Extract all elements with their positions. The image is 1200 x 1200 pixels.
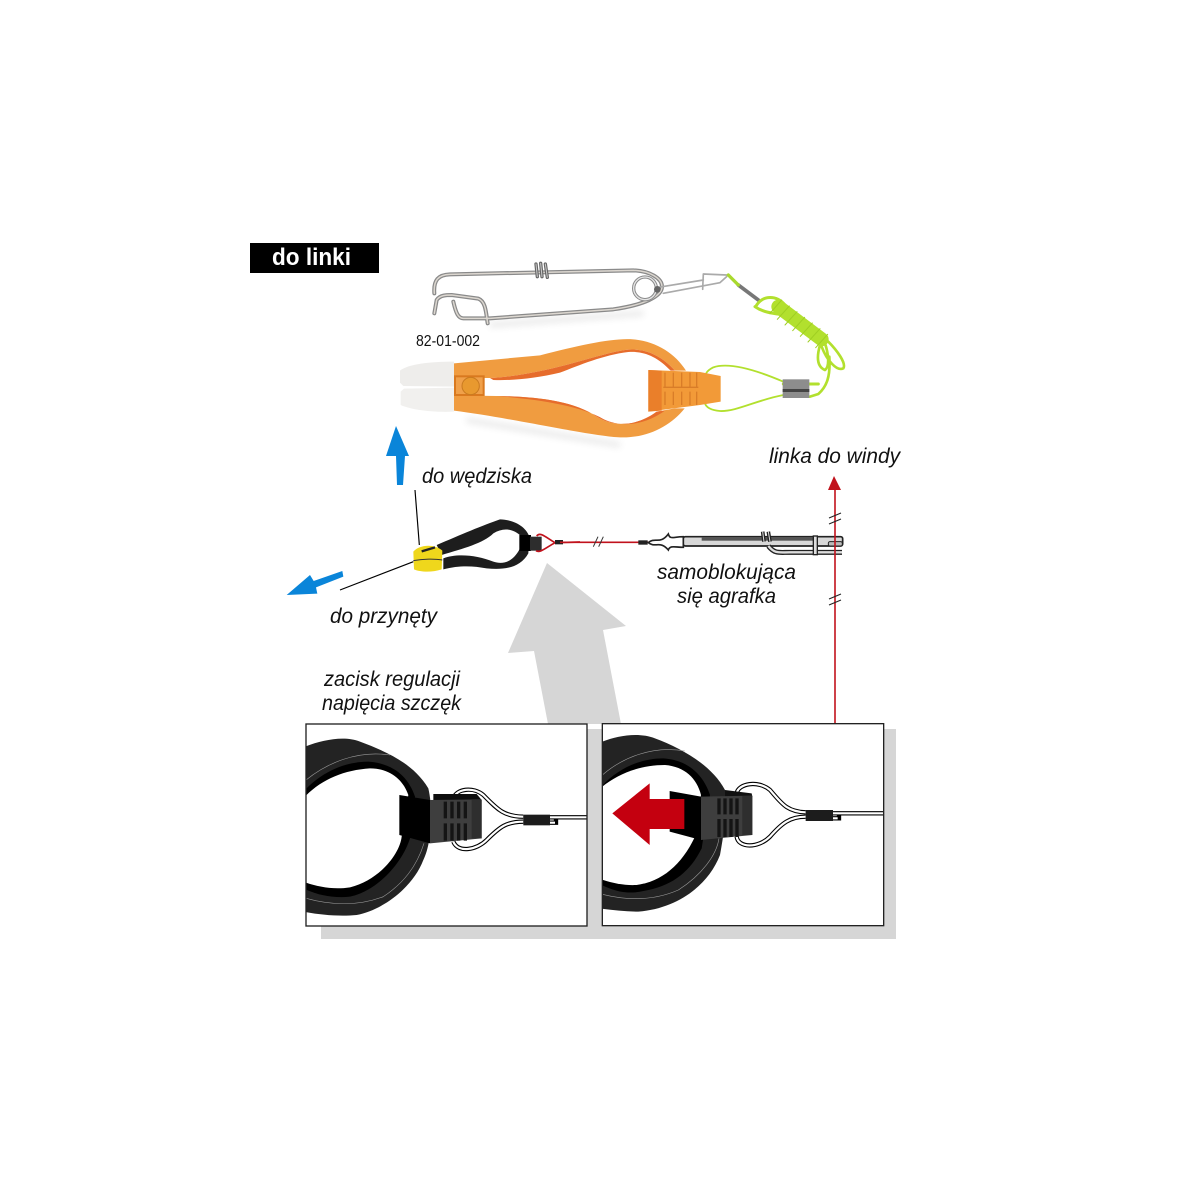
orange pivot [454,375,485,396]
red horizontal leader [560,540,648,545]
label: zacisk regulacji napięcia szczęk: napięcia szczęk [322,692,462,715]
orange handle lower arm [454,395,685,437]
connector block [519,535,542,551]
label: zacisk regulacji napięcia szczęk [322,668,462,715]
product photo: safety pin with orange release clip [400,263,844,445]
crimp sleeve [783,379,809,398]
large grey arrow [508,563,626,724]
orange slider block [648,370,721,412]
red line to winch with arrowhead [828,476,841,723]
swivel [648,534,683,550]
handle [303,739,431,916]
connector [725,790,752,797]
self-locking pin [683,532,843,555]
blue arrow up [386,426,409,485]
red loop [536,534,580,551]
label: do linki [250,243,379,273]
wire loop [737,784,884,845]
pin wire [434,263,758,323]
red line and snap swivel diagram [560,532,843,555]
label: samoblokująca się agrafka: samoblokująca [657,561,796,584]
green coil [705,297,844,411]
black lines to labels [340,490,419,590]
grey background shadow [321,729,896,939]
label: samoblokująca się agrafka [657,561,796,608]
yellow tension clamp [413,546,442,572]
connector [433,794,482,800]
panel: clamp released detail with red arrow [598,724,884,926]
white jaws [400,362,454,387]
red arrow [612,783,684,845]
label: zacisk regulacji napięcia szczęk: zacisk regulacji [323,668,461,691]
black handle [437,519,529,569]
part number: 82-01-002 [416,333,480,350]
handle [598,735,726,912]
label: do wędziska: do wędziska [422,465,532,488]
label: linka do windy: linka do windy [769,445,901,468]
small black clip diagram [287,490,580,595]
soft photo shadow [467,313,643,445]
label: do linki: do linki [272,244,351,271]
label: samoblokująca się agrafka: się agrafka [677,585,776,608]
orange handle upper arm [454,339,686,378]
wire loop [453,790,587,849]
blue arrow left [287,571,343,595]
label: do przynęty: do przynęty [330,605,438,628]
break mark [593,537,603,547]
panel: clamp closed detail [303,724,587,926]
